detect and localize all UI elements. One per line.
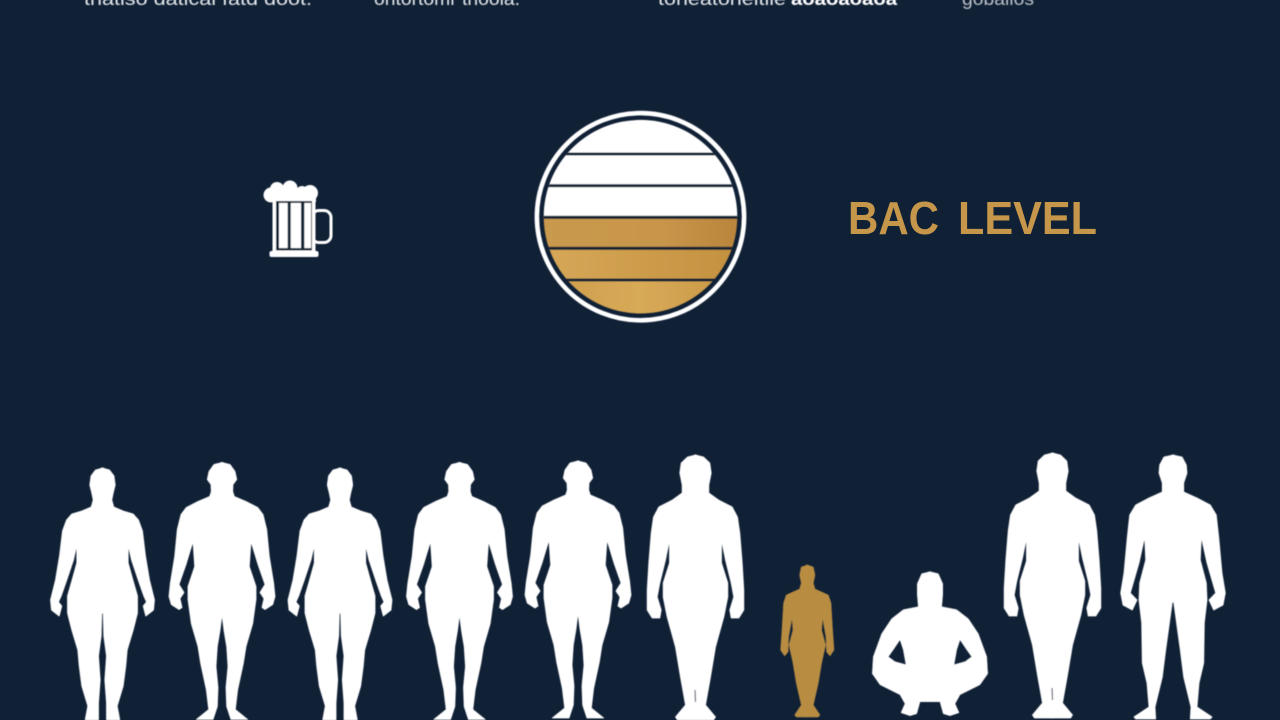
mug foam bbox=[264, 180, 318, 202]
disc bands bbox=[540, 118, 741, 316]
mug interior frame bbox=[276, 201, 312, 250]
figure 10 bbox=[1121, 455, 1225, 719]
figure 6 bbox=[647, 455, 744, 720]
figure 2 bbox=[169, 462, 275, 720]
icon: beer mug bbox=[264, 180, 331, 257]
figure 3 bbox=[288, 468, 392, 720]
figure 7: highlighted gold small figure bbox=[781, 565, 834, 717]
word LEVEL: LEVEL bbox=[958, 192, 1097, 244]
figure 5 bbox=[525, 461, 631, 718]
row of body silhouettes bbox=[50, 453, 1225, 720]
figure 8: squatting figure bbox=[872, 572, 988, 716]
top text strip, cropped at the upper edge bbox=[84, 0, 1034, 9]
mug glass panels bbox=[279, 203, 311, 248]
chart: BAC level striped disc bbox=[537, 113, 744, 320]
mug handle bbox=[312, 210, 331, 242]
disc outer ring bbox=[537, 113, 744, 320]
mug body bbox=[272, 199, 316, 253]
figure 4 bbox=[406, 462, 512, 720]
heading: BAC LEVEL bbox=[848, 192, 1097, 244]
figure 9 bbox=[1004, 453, 1101, 718]
figure 1 bbox=[50, 468, 154, 720]
mug base bbox=[270, 251, 318, 257]
word BAC: BAC bbox=[848, 192, 939, 244]
